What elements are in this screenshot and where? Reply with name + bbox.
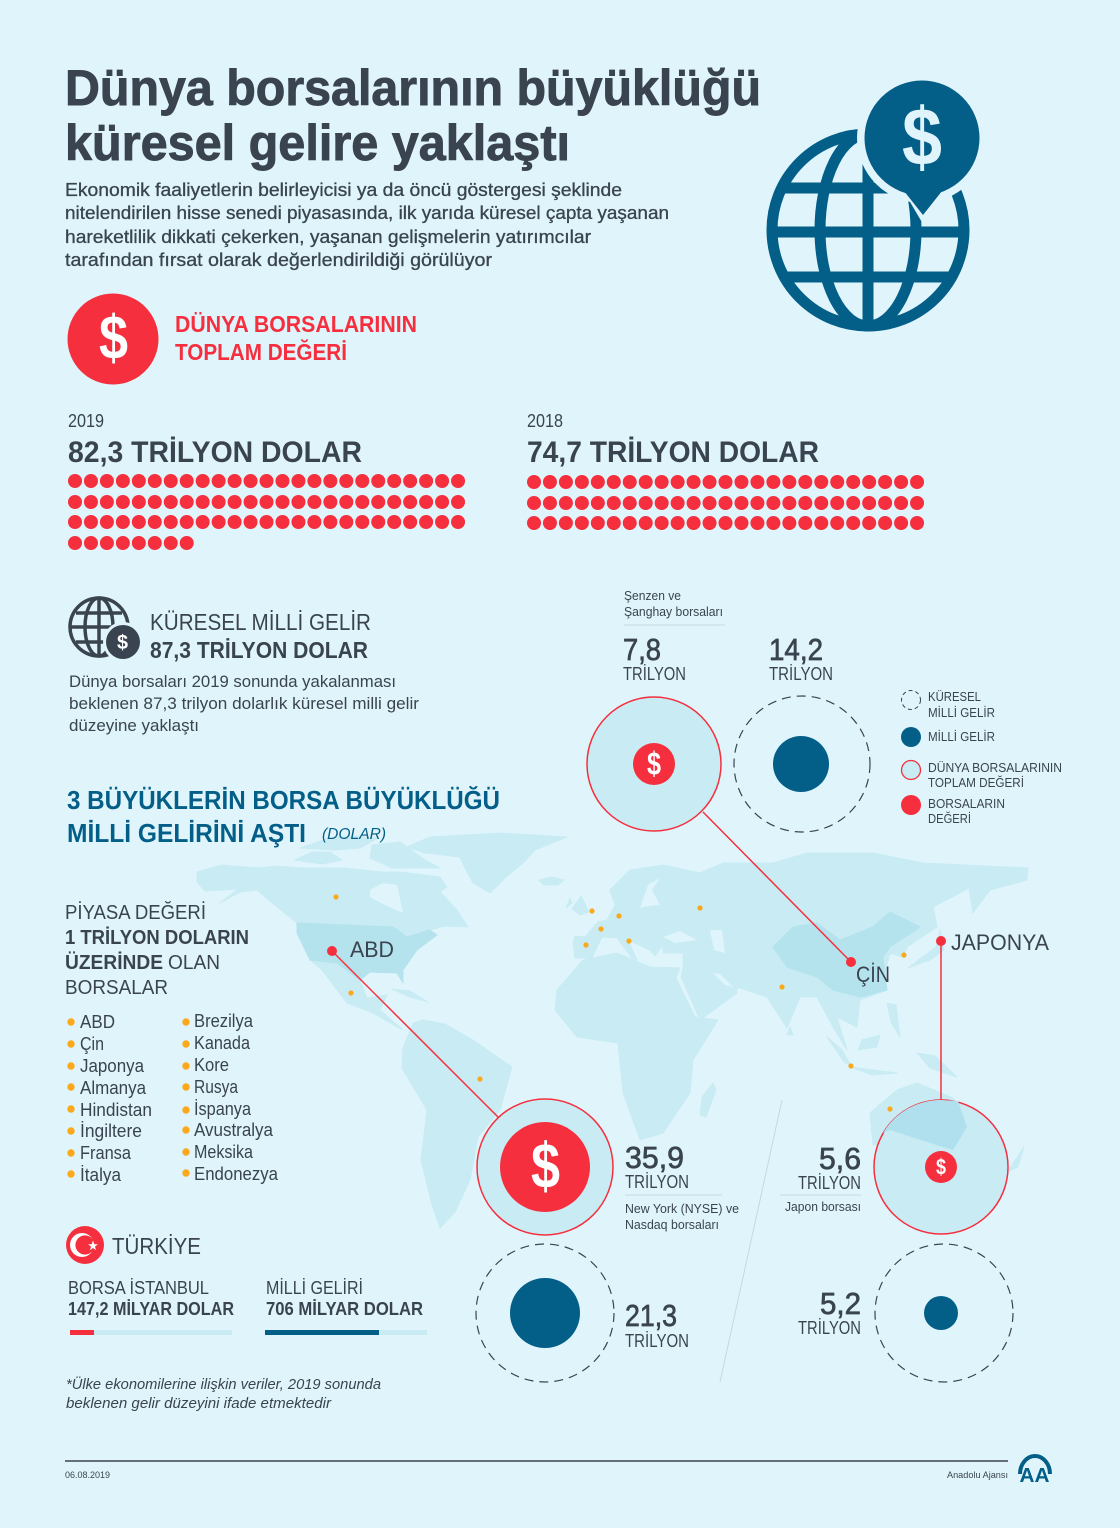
text: market value heading	[65, 901, 249, 999]
icon: small globe with dollar	[70, 598, 143, 662]
icon: Turkish flag	[66, 1226, 104, 1264]
logo: Anadolu Agency	[1020, 1456, 1050, 1487]
map: Arctic islands	[295, 836, 440, 868]
bar: Borsa Istanbul	[70, 1330, 232, 1335]
bar: national income	[265, 1330, 427, 1335]
heading: 3 biggest: 3 BÜYÜKLERİN BORSA BÜYÜKLÜĞÜ	[67, 785, 500, 815]
legend: TOPLAM DEĞERİ	[928, 775, 1024, 790]
map: Southeast Asia islands	[787, 1003, 957, 1077]
text: Japan values: 5,2	[820, 1286, 861, 1321]
panel: 2018 value	[527, 411, 918, 523]
heading: 3 biggest	[67, 785, 500, 848]
chart: China income circle	[734, 696, 870, 832]
map: Japan	[908, 930, 944, 968]
panel: China values: TRİLYON	[769, 664, 833, 684]
list: countries column 2	[182, 1011, 279, 1184]
map: South America	[402, 1020, 512, 1228]
text: income description: beklenen 87,3 trilyon dolarlık küresel milli gelir	[69, 694, 419, 713]
list: countries column 1: Çin	[80, 1034, 104, 1054]
intro text: tarafından fırsat olarak değerlendirildiği görülüyor	[65, 250, 492, 270]
legend: DÜNYA BORSALARININ	[928, 761, 1062, 775]
list: countries column 2: Kore	[194, 1055, 229, 1075]
list: countries column 1: ABD	[80, 1012, 115, 1032]
map: Australia and New Zealand	[870, 1083, 1024, 1180]
map: Iceland	[539, 877, 564, 885]
list: countries column 2: Brezilya	[194, 1011, 254, 1031]
panel: Turkey: 147,2 MİLYAR DOLAR	[68, 1299, 234, 1319]
icon: red dollar circle: $	[99, 304, 128, 373]
legend: MİLLİ GELİR	[928, 730, 995, 744]
legend	[901, 690, 1062, 826]
map: Africa	[555, 953, 718, 1140]
map: Madagascar	[700, 1083, 716, 1117]
list: countries column 2: Avustralya	[194, 1120, 274, 1140]
dot chart: 2018	[534, 482, 918, 523]
intro text: nitelendirilen hisse senedi piyasasında, ilk yarıda küresel çapta yaşanan	[65, 203, 669, 223]
panel: Turkey: TÜRKİYE	[112, 1233, 201, 1259]
map: British Isles	[566, 896, 589, 915]
chart: Japan exchange circle: $	[936, 1154, 946, 1180]
panel: 2018 value: 74,7 TRİLYON DOLAR	[527, 436, 819, 469]
map pin: Japan: JAPONYA	[951, 930, 1049, 955]
panel: China values: Şenzen ve	[624, 589, 681, 603]
footer	[65, 1456, 1050, 1487]
panel: China values	[623, 589, 833, 684]
title: Dünya borsalarının büyüklüğü	[65, 60, 761, 116]
panel: Turkey	[66, 1226, 427, 1335]
text: Japan values: Japon borsası	[785, 1200, 861, 1214]
intro text: hareketlilik dikkati çekerken, yaşanan gelişmelerin yatırımcılar	[65, 227, 591, 247]
map: Mexico and Central America	[310, 960, 403, 1030]
text: USA values: 21,3	[625, 1298, 677, 1333]
intro text	[65, 180, 669, 270]
text: income description	[69, 672, 419, 735]
list: countries column 1: Japonya	[80, 1056, 145, 1076]
list: countries column 1: İngiltere	[80, 1121, 142, 1141]
logo: Anadolu Agency: AA	[1020, 1465, 1050, 1487]
map: Greenland	[407, 833, 567, 893]
text: market value heading: ÜZERİNDE	[65, 951, 163, 974]
text: Japan values: 5,6	[819, 1141, 861, 1176]
map: China	[773, 912, 920, 997]
map pin: USA	[327, 937, 394, 962]
panel: 2019 value	[68, 411, 459, 543]
list: countries column 1: Almanya	[80, 1078, 147, 1098]
heading: world exchanges total: DÜNYA BORSALARININ	[175, 311, 417, 337]
text: Japan values	[780, 1141, 861, 1338]
map markers: exchanges over 1 trillion	[333, 894, 907, 1112]
legend: BORSALARIN	[928, 797, 1005, 811]
list: countries column 2: Meksika	[194, 1142, 254, 1162]
legend: MİLLİ GELİR	[928, 706, 995, 720]
chart: USA exchange circle: $	[531, 1130, 560, 1202]
dot chart: 2019	[75, 481, 459, 543]
panel: China values: 14,2	[769, 632, 823, 667]
panel: China values: 7,8	[623, 632, 661, 667]
map pin: China: ÇİN	[856, 962, 890, 987]
legend: KÜRESEL	[928, 690, 981, 704]
chart: USA exchange circle	[477, 1099, 613, 1235]
footer: Anadolu Ajansı	[947, 1470, 1008, 1480]
icon: globe with dollar bubble: $	[902, 92, 942, 183]
chart: USA income circle	[476, 1244, 614, 1382]
icon: red dollar circle	[68, 294, 158, 384]
panel: global national income	[69, 598, 419, 735]
intro text: Ekonomik faaliyetlerin belirleyicisi ya da öncü göstergesi şeklinde	[65, 180, 622, 200]
panel: China values: TRİLYON	[623, 664, 686, 684]
panel: China values: Şanghay borsaları	[624, 605, 723, 619]
text: market value heading: OLAN	[168, 952, 220, 974]
map pin: USA: ABD	[350, 937, 394, 962]
chart: Japan exchange circle	[874, 1100, 1008, 1234]
footnote	[66, 1375, 381, 1412]
text: USA values: 35,9	[625, 1140, 684, 1175]
map: Canada and Alaska	[197, 865, 468, 937]
panel: Turkey: 706 MİLYAR DOLAR	[266, 1299, 423, 1319]
footer: 06.08.2019	[65, 1470, 110, 1480]
icon: globe with dollar bubble	[772, 73, 987, 326]
text: USA values: TRİLYON	[625, 1172, 689, 1192]
heading: world exchanges total: TOPLAM DEĞERİ	[175, 338, 347, 365]
heading: 3 biggest: MİLLİ GELİRİNİ AŞTI	[67, 818, 306, 848]
list: countries column 2: Endonezya	[194, 1164, 279, 1184]
text: USA values	[625, 1140, 739, 1351]
title	[65, 60, 761, 171]
text: USA values: TRİLYON	[625, 1331, 689, 1351]
connector lines	[332, 812, 941, 1117]
footnote: *Ülke ekonomilerine ilişkin veriler, 2019 sonunda	[66, 1375, 381, 1393]
panel: global national income: 87,3 TRİLYON DOLAR	[150, 637, 368, 663]
heading: 3 biggest: (DOLAR)	[322, 826, 386, 843]
list: countries column 2: Rusya	[194, 1077, 239, 1097]
panel: 2018 value: 2018	[527, 411, 563, 431]
text: USA values: New York (NYSE) ve	[625, 1202, 739, 1216]
list: countries column 1	[67, 1012, 152, 1185]
panel: Turkey: BORSA İSTANBUL	[68, 1278, 209, 1298]
list: countries column 2: Kanada	[194, 1033, 251, 1053]
world map	[197, 833, 1028, 1228]
panel: 2019 value: 2019	[68, 411, 104, 431]
chart: China exchange circle: $	[647, 746, 661, 782]
map: United States	[297, 923, 437, 983]
map: Eurasia	[573, 853, 1028, 1050]
title: küresel gelire yaklaştı	[65, 115, 570, 171]
panel: Turkey: MİLLİ GELİRİ	[266, 1278, 363, 1298]
panel: total value heading	[68, 294, 417, 384]
text: market value heading: PİYASA DEĞERİ	[65, 901, 206, 924]
text: Japan values: TRİLYON	[798, 1318, 861, 1338]
panel: 2019 value: 82,3 TRİLYON DOLAR	[68, 436, 362, 469]
text: market value heading: BORSALAR	[65, 977, 168, 999]
icon: small globe with dollar: $	[117, 632, 128, 654]
map pin: China	[846, 957, 890, 987]
list: countries column 1: Hindistan	[80, 1100, 152, 1120]
list: countries column 2: İspanya	[194, 1099, 252, 1119]
text: income description: Dünya borsaları 2019 sonunda yakalanması	[69, 672, 396, 691]
text: USA values: Nasdaq borsaları	[625, 1218, 719, 1232]
chart: Japan income circle	[875, 1244, 1013, 1382]
list: countries column 1: Fransa	[80, 1143, 132, 1163]
panel: global national income: KÜRESEL MİLLİ GELİR	[150, 609, 371, 635]
text: Japan values: TRİLYON	[798, 1173, 861, 1193]
text: income description: düzeyine yaklaştı	[69, 716, 199, 735]
list: countries column 1: İtalya	[80, 1165, 122, 1185]
text: market value heading: 1 TRİLYON DOLARIN	[65, 926, 249, 949]
footnote: beklenen gelir düzeyini ifade etmektedir	[66, 1396, 332, 1412]
chart: China exchange circle	[587, 697, 721, 831]
legend: DEĞERİ	[928, 811, 971, 826]
map: inland seas	[370, 878, 733, 987]
heading: world exchanges total	[175, 311, 417, 365]
map: Caribbean	[392, 989, 428, 1002]
